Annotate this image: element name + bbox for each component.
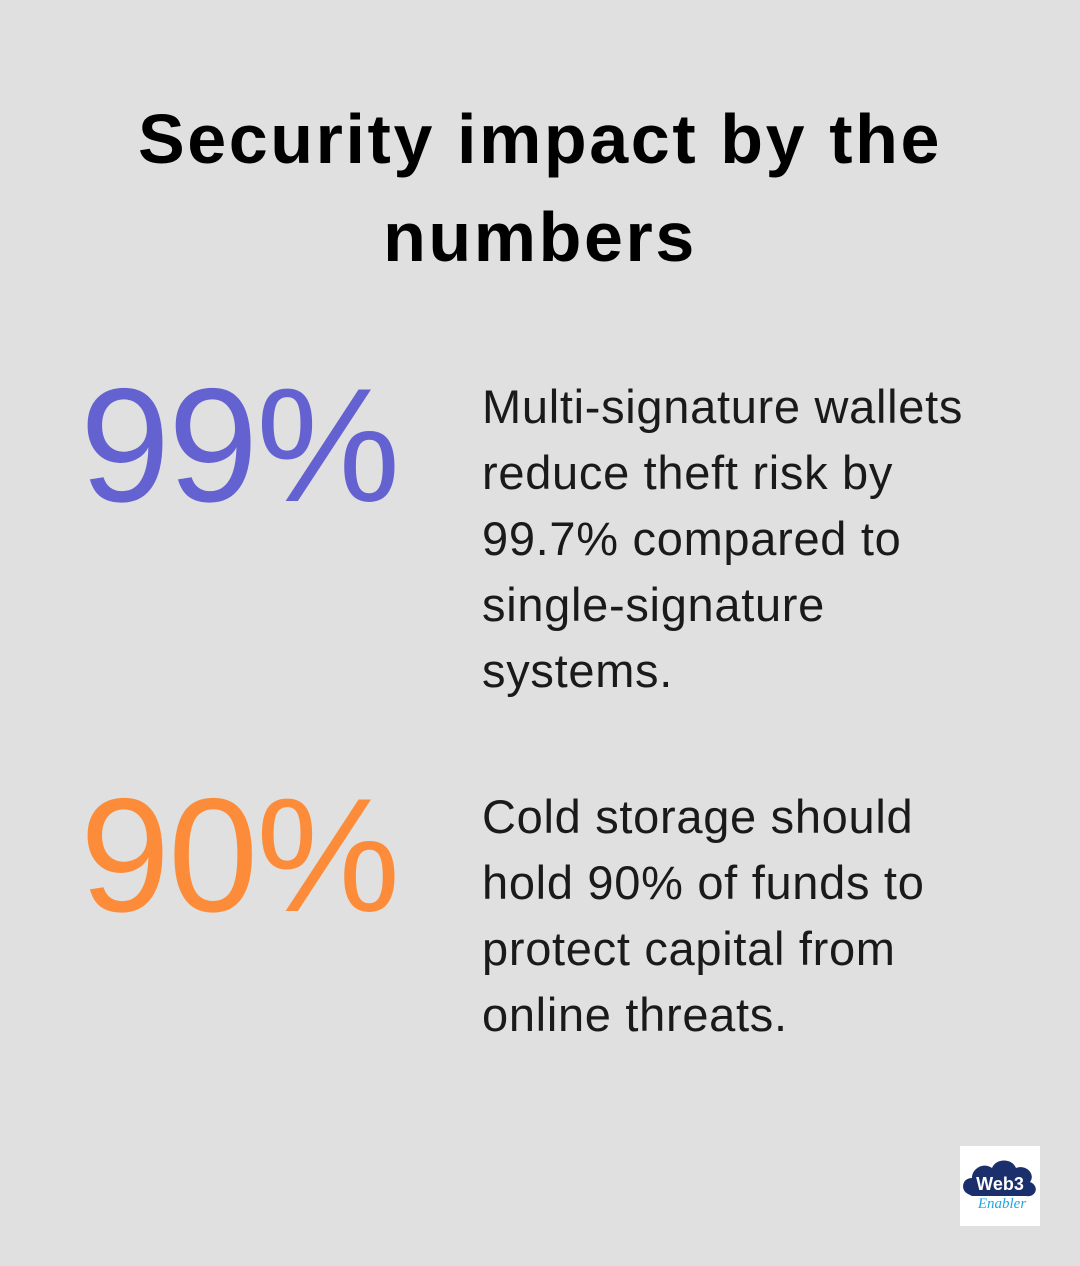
text: multi-signature bbox=[482, 380, 963, 697]
stat: 90%: 90% bbox=[80, 765, 398, 946]
text: cold storage: hold 90% of funds to bbox=[482, 856, 925, 909]
text: multi-signature: Multi-signature wallets bbox=[482, 380, 963, 433]
stat: 99%: 99% bbox=[80, 355, 398, 536]
text: multi-signature: systems. bbox=[482, 644, 673, 697]
text: cold storage: Cold storage should bbox=[482, 790, 913, 843]
text: cold storage: protect capital from bbox=[482, 922, 896, 975]
text: multi-signature: reduce theft risk by bbox=[482, 446, 893, 499]
title: Security impact by the bbox=[138, 100, 942, 178]
logo: Enabler bbox=[977, 1196, 1026, 1212]
text: multi-signature: 99.7% compared to bbox=[482, 512, 901, 565]
logo bbox=[960, 1146, 1040, 1226]
text: cold storage bbox=[482, 790, 925, 1041]
text: multi-signature: single-signature bbox=[482, 578, 825, 631]
title bbox=[138, 100, 942, 276]
title: numbers bbox=[383, 198, 697, 276]
logo: Web3 bbox=[976, 1174, 1024, 1194]
text: cold storage: online threats. bbox=[482, 988, 788, 1041]
